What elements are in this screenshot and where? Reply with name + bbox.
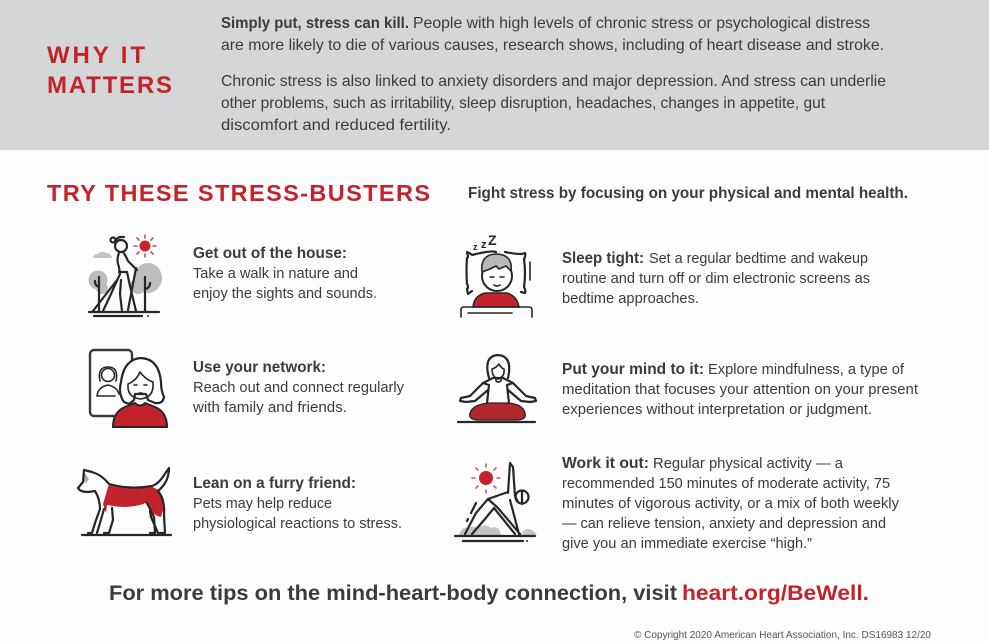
text block: stress can kill: are more likely to die of various causes, research shows, including of heart disease and stroke. (221, 37, 884, 54)
text block: use your network: Use your network: (193, 359, 326, 376)
text block: chronic stress (221, 73, 886, 134)
icon: meditation (458, 355, 536, 422)
text block: chronic stress: other problems, such as irritability, sleep disruption, headaches, changes in appetite, gut (221, 95, 826, 112)
text block: sleep tight (562, 250, 870, 307)
heading: why it matters: MATTERS (47, 72, 172, 99)
text block: get out of the house: enjoy the sights and sounds. (193, 285, 377, 302)
icon: yoga triangle pose (455, 463, 537, 542)
text block: get out of the house (193, 245, 377, 302)
text block: stress can kill: People with high levels of chronic stress or psychological distress (413, 15, 870, 32)
text block: work it out: Regular physical activity — a (653, 455, 844, 472)
text block: lean on a furry friend: physiological reactions to stress. (193, 515, 402, 532)
text block: stress can kill (221, 15, 884, 54)
text block: work it out (562, 455, 899, 552)
text block: lean on a furry friend (193, 475, 402, 532)
text block: work it out: minutes of vigorous activity, or a mix of both weekly (562, 495, 899, 512)
text block: use your network: Reach out and connect regularly (193, 379, 404, 396)
text block: lean on a furry friend: Pets may help reduce (193, 495, 332, 512)
text block: put your mind to it: experiences without interpretation or judgment. (562, 401, 872, 418)
text block: use your network: with family and friends. (192, 399, 347, 416)
text block: use your network (192, 359, 404, 416)
copyright: © Copyright 2020 American Heart Association, Inc. DS16983 12/20 (634, 629, 931, 641)
heading: why it matters: WHY IT (47, 42, 145, 69)
icon: phone and friend (90, 350, 167, 427)
heading: why it matters (47, 42, 172, 99)
call to action: For more tips on the mind-heart-body connection, visit (109, 582, 677, 605)
text block: sleep tight: routine and turn off or dim electronic screens as (562, 270, 870, 287)
text block: work it out: Work it out: (562, 455, 649, 472)
call to action: heart.org/BeWell. (682, 582, 869, 605)
icon: dog (78, 468, 171, 535)
text block: work it out: recommended 150 minutes of moderate activity, 75 (562, 475, 890, 492)
heading: try these stress-busters: TRY THESE STRESS-BUSTERS (47, 180, 430, 206)
text block: put your mind to it: meditation that focuses your attention on your present (562, 381, 919, 398)
text block: sleep tight: bedtime approaches. (562, 290, 699, 307)
text block: sleep tight: Set a regular bedtime and wakeup (649, 250, 868, 267)
text block: put your mind to it: Put your mind to it: (562, 361, 704, 378)
text block: stress can kill: Simply put, stress can kill. (221, 15, 409, 32)
text block: sleep tight: Sleep tight: (562, 250, 644, 267)
text block: put your mind to it (562, 361, 919, 418)
icon: sleeping person: z (481, 239, 487, 251)
subheading: Fight stress by focusing on your physical and mental health. (468, 185, 908, 202)
text block: work it out: give you an immediate exercise “high.” (562, 535, 812, 552)
text block: lean on a furry friend: Lean on a furry friend: (193, 475, 356, 492)
text block: put your mind to it: Explore mindfulness, a type of (708, 361, 905, 378)
text block: work it out: — can relieve tension, anxiety and depression and (562, 515, 886, 532)
text block: chronic stress: Chronic stress is also linked to anxiety disorders and major depression. And stress can underlie (221, 73, 886, 90)
icon: sleeping person (461, 232, 532, 317)
icon: walker in nature (88, 235, 162, 317)
text block: get out of the house: Take a walk in nature and (193, 265, 358, 282)
text block: get out of the house: Get out of the house: (193, 245, 347, 262)
panel: why it matters (0, 0, 989, 150)
text block: chronic stress: discomfort and reduced fertility. (221, 117, 451, 134)
icon: sleeping person: Z (488, 232, 497, 248)
icon: sleeping person: z (473, 242, 478, 252)
